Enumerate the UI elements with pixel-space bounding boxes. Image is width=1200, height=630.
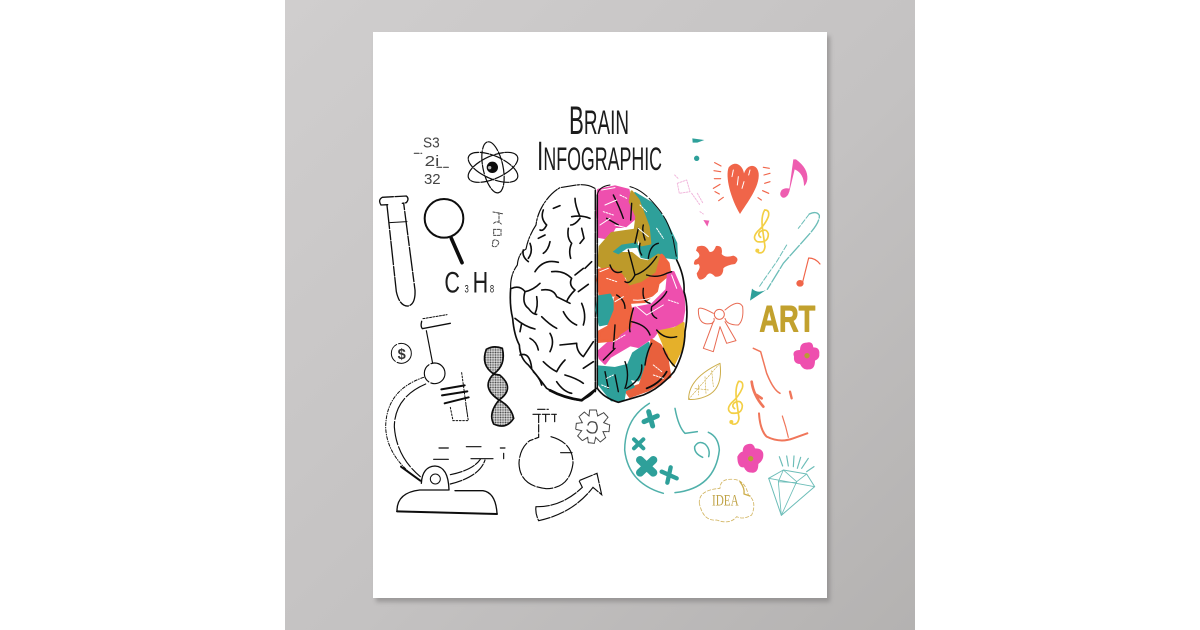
title line: Infographic: INFOGRAPHIC (537, 133, 662, 179)
white speckles (600, 188, 678, 388)
icon: yellow treble clef (754, 210, 769, 253)
icon: teal palette (625, 403, 719, 493)
teal music marks (692, 138, 704, 161)
icon: pale pink paintbrush (675, 175, 709, 227)
small vertical formula (492, 212, 504, 247)
art label: ART (759, 297, 815, 339)
poster shadow (376, 36, 830, 602)
orange centre lobe left (597, 268, 628, 296)
chemical formula: C (444, 265, 460, 300)
teal upper lobe (635, 193, 677, 260)
pink right lobe (598, 272, 684, 363)
icon: pink music note (780, 159, 807, 198)
orange centre lobe right (617, 255, 670, 303)
teal small lobe (597, 295, 615, 325)
icon: DNA helix (484, 347, 514, 426)
teal stripe (613, 243, 638, 254)
icon: test tube (380, 196, 415, 306)
art doodles upper group (675, 138, 820, 352)
title (537, 99, 662, 179)
chemical formula: 8 (490, 283, 494, 295)
icon: yellow treble clef small (728, 381, 743, 424)
icon: pink flower lower (737, 444, 763, 473)
icon: diamond (769, 456, 815, 515)
icon: curved arrow (536, 473, 602, 521)
numbers (414, 136, 450, 188)
title line: Brain: BRAIN (569, 99, 629, 143)
left hemisphere (510, 185, 596, 400)
icon: orange paint splat (694, 246, 737, 280)
teal bottom lobe (598, 365, 633, 400)
icon: leaf (689, 363, 721, 399)
numbers: 32 (424, 172, 441, 188)
brain (510, 185, 687, 402)
yellow lobe (658, 323, 683, 365)
icon: orange music note (796, 258, 820, 287)
icon: round flask (519, 409, 573, 489)
icon: coin: $ (398, 347, 406, 363)
mustard middle lobe (599, 230, 663, 287)
icon: coin (391, 343, 411, 363)
icon: microscope (386, 315, 505, 514)
teal middle lower lobe (628, 343, 650, 380)
right hemisphere colour patches (597, 187, 684, 400)
icon: pink flower upper (793, 342, 819, 370)
artwork (380, 99, 820, 522)
mustard strip (630, 192, 650, 245)
gear hub (587, 422, 597, 433)
art doodles lower group (625, 342, 819, 522)
icon: teal paintbrush (750, 213, 819, 301)
icon: heart (713, 163, 770, 214)
icon: idea cloud (699, 479, 754, 522)
left outline (511, 185, 595, 288)
pink top lobe (597, 187, 637, 238)
icon: idea cloud: IDEA (712, 493, 739, 510)
chemical formula: H (473, 265, 488, 300)
orange bottom lobe (625, 340, 670, 397)
numbers: 2i (425, 154, 439, 170)
poster sheet (373, 32, 827, 598)
icon: gear (576, 410, 610, 443)
right hemisphere outline and sulci (597, 185, 687, 402)
chemical formula (444, 265, 494, 300)
icon: atom (464, 140, 522, 195)
science doodles upper group (380, 136, 522, 306)
icon: magnifying glass (425, 199, 463, 263)
icon: orange guitar (752, 348, 807, 440)
icon: bow (698, 303, 743, 352)
science doodles lower group (386, 315, 610, 521)
orange lower-left lobe (598, 297, 632, 342)
grey wall background (285, 0, 915, 630)
numbers: S3 (423, 136, 440, 152)
left sulci (512, 198, 593, 393)
chemical formula: 3 (464, 283, 469, 295)
